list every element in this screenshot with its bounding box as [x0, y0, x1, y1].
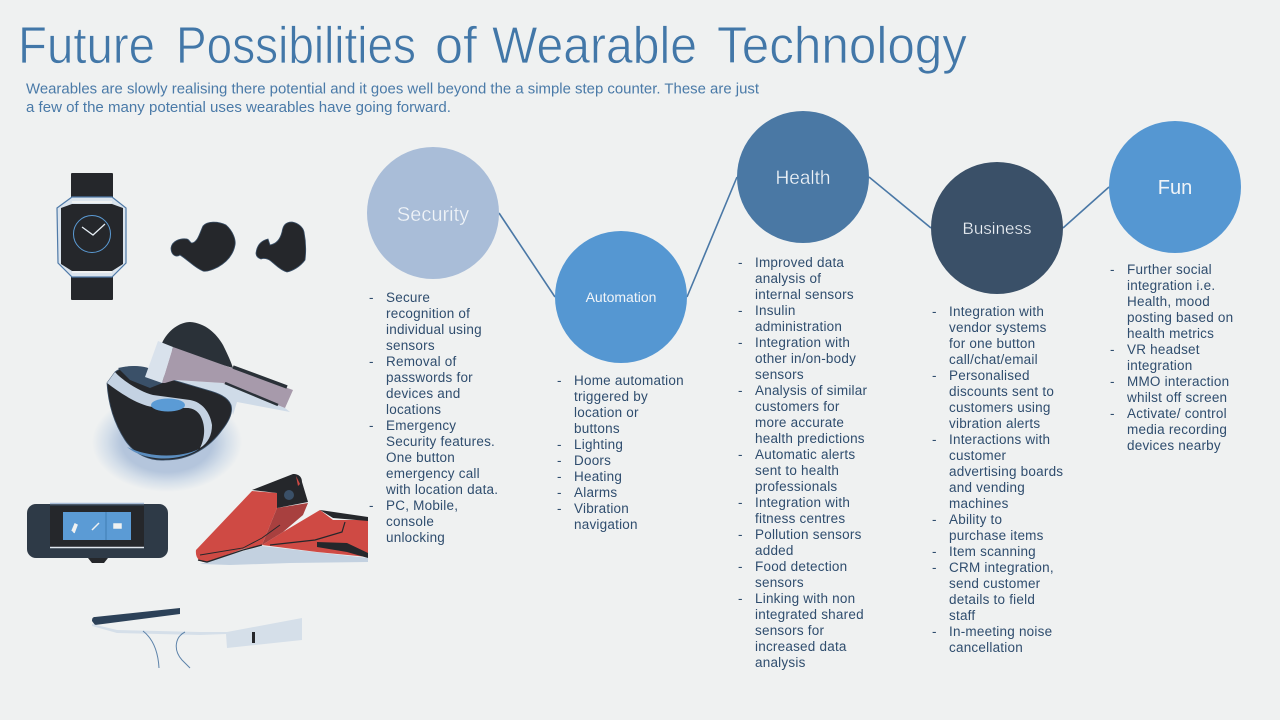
- text block: Automation: location or: [574, 405, 639, 420]
- text block: Health: -: [738, 255, 743, 270]
- title: Wearable: [492, 17, 697, 75]
- text block: Security: console: [386, 514, 434, 529]
- icon: right earbud: [256, 222, 306, 272]
- text block: Business: -: [932, 304, 937, 319]
- text block: Security: emergency call: [386, 466, 480, 481]
- text block: Business: Integration with: [949, 304, 1044, 319]
- text block: Automation: -: [557, 437, 562, 452]
- text block: Health: fitness centres: [755, 511, 845, 526]
- text block: Health: health predictions: [755, 431, 865, 446]
- text block: Security: Security features.: [386, 434, 495, 449]
- text block: Automation: Vibration: [574, 501, 629, 516]
- text block: Automation: -: [557, 373, 562, 388]
- text block: Business: -: [932, 560, 937, 575]
- text block: Business: Interactions with: [949, 432, 1050, 447]
- icon: fitness band: [27, 504, 168, 563]
- title: Possibilities: [176, 17, 416, 75]
- text block: Health: Analysis of similar: [755, 383, 867, 398]
- text block: Health: Integration with: [755, 335, 850, 350]
- text block: Health: sensors: [755, 367, 804, 382]
- circle: Security: [367, 147, 499, 279]
- text block: Health: customers for: [755, 399, 840, 414]
- text block: Automation: -: [557, 453, 562, 468]
- text block: Health: [738, 255, 867, 670]
- text block: Fun: health metrics: [1127, 326, 1214, 341]
- text block: Fun: -: [1110, 262, 1115, 277]
- text block: Health: Improved data: [755, 255, 844, 270]
- icon: smart glasses: [92, 608, 302, 668]
- icon: VR headset: [92, 322, 293, 492]
- circle: Security: Security: [397, 204, 469, 226]
- text block: Business: -: [932, 544, 937, 559]
- text block: Fun: -: [1110, 374, 1115, 389]
- text block: Health: -: [738, 495, 743, 510]
- text block: Fun: MMO interaction: [1127, 374, 1229, 389]
- text block: Business: -: [932, 432, 937, 447]
- circle: Health: [737, 111, 869, 243]
- text block: Business: vendor systems: [949, 320, 1047, 335]
- text block: Health: increased data: [755, 639, 847, 654]
- text block: Health: analysis of: [755, 271, 821, 286]
- text block: Automation: Home automation: [574, 373, 684, 388]
- text block: Automation: triggered by: [574, 389, 648, 404]
- text block: Business: send customer: [949, 576, 1041, 591]
- text block: Business: Ability to: [949, 512, 1002, 527]
- circle: Fun: Fun: [1158, 177, 1192, 199]
- text block: Security: individual using: [386, 322, 482, 337]
- text block: Fun: Health, mood: [1127, 294, 1210, 309]
- text block: Health: added: [755, 543, 794, 558]
- text block: Health: -: [738, 591, 743, 606]
- circle: Automation: Automation: [586, 289, 656, 305]
- text block: Security: Removal of: [386, 354, 457, 369]
- text block: Business: and vending: [949, 480, 1025, 495]
- text block: Security: -: [369, 498, 374, 513]
- text block: Business: details to field: [949, 592, 1035, 607]
- text block: Health: Integration with: [755, 495, 850, 510]
- text block: Health: Food detection: [755, 559, 847, 574]
- text block: Business: -: [932, 512, 937, 527]
- intro text: a few of the many potential uses wearables have going forward.: [26, 99, 451, 116]
- title: [18, 17, 967, 75]
- text block: Business: call/chat/email: [949, 352, 1038, 367]
- text block: Security: Emergency: [386, 418, 456, 433]
- text block: Security: recognition of: [386, 306, 470, 321]
- text block: Fun: media recording: [1127, 422, 1227, 437]
- connector lines: [499, 177, 1109, 297]
- text block: Business: vibration alerts: [949, 416, 1040, 431]
- text block: Business: staff: [949, 608, 975, 623]
- icon: left earbud: [171, 222, 235, 271]
- icon: red smart insoles: [196, 474, 368, 565]
- text block: Security: One button: [386, 450, 455, 465]
- text block: Health: Pollution sensors: [755, 527, 862, 542]
- text block: Business: purchase items: [949, 528, 1044, 543]
- title: of: [435, 17, 478, 75]
- text block: Fun: integration: [1127, 358, 1192, 373]
- text block: Health: more accurate: [755, 415, 844, 430]
- text block: Fun: posting based on: [1127, 310, 1233, 325]
- text block: Fun: -: [1110, 342, 1115, 357]
- title: Future: [18, 17, 155, 75]
- text block: Business: machines: [949, 496, 1009, 511]
- text block: Health: administration: [755, 319, 842, 334]
- text block: Business: customers using: [949, 400, 1051, 415]
- text block: Security: -: [369, 418, 374, 433]
- text block: Health: -: [738, 447, 743, 462]
- intro text: [26, 80, 760, 116]
- circle: Business: Business: [963, 219, 1031, 238]
- text block: Fun: VR headset: [1127, 342, 1200, 357]
- circle: Business: [931, 162, 1063, 294]
- text block: Security: locations: [386, 402, 441, 417]
- text block: Security: -: [369, 290, 374, 305]
- text block: Health: integrated shared: [755, 607, 864, 622]
- text block: Business: -: [932, 624, 937, 639]
- text block: Automation: Alarms: [574, 485, 617, 500]
- text block: Health: -: [738, 303, 743, 318]
- text block: Health: sensors for: [755, 623, 824, 638]
- text block: Business: advertising boards: [949, 464, 1063, 479]
- text block: Health: -: [738, 383, 743, 398]
- title: Technology: [717, 17, 967, 75]
- intro text: Wearables are slowly realising there potential and it goes well beyond the a simple step counter. These are just: [26, 80, 760, 98]
- text block: Automation: navigation: [574, 517, 638, 532]
- text block: Security: -: [369, 354, 374, 369]
- text block: Fun: integration i.e.: [1127, 278, 1215, 293]
- text block: Business: Item scanning: [949, 544, 1036, 559]
- text block: Security: passwords for: [386, 370, 473, 385]
- text block: Automation: buttons: [574, 421, 620, 436]
- text block: Health: -: [738, 335, 743, 350]
- text block: Fun: -: [1110, 406, 1115, 421]
- text block: Automation: Lighting: [574, 437, 623, 452]
- text block: Health: sent to health: [755, 463, 839, 478]
- text block: Fun: devices nearby: [1127, 438, 1221, 453]
- circle: Automation: [555, 231, 687, 363]
- text block: Security: sensors: [386, 338, 435, 353]
- text block: Security: [369, 290, 498, 545]
- text block: Automation: [557, 373, 684, 532]
- text block: Automation: -: [557, 485, 562, 500]
- text block: Business: discounts sent to: [949, 384, 1054, 399]
- text block: Fun: Further social: [1127, 262, 1212, 277]
- text block: Security: devices and: [386, 386, 460, 401]
- text block: Security: unlocking: [386, 530, 445, 545]
- circle: Health: Health: [776, 168, 830, 189]
- text block: Automation: -: [557, 469, 562, 484]
- text block: Health: internal sensors: [755, 287, 854, 302]
- text block: Business: for one button: [949, 336, 1035, 351]
- text block: Security: PC, Mobile,: [386, 498, 458, 513]
- text block: Health: analysis: [755, 655, 806, 670]
- text block: Business: cancellation: [949, 640, 1023, 655]
- text block: Business: customer: [949, 448, 1007, 463]
- text block: Fun: [1110, 262, 1233, 453]
- text block: Automation: -: [557, 501, 562, 516]
- text block: Health: -: [738, 527, 743, 542]
- text block: Automation: Heating: [574, 469, 622, 484]
- text block: Health: Insulin: [755, 303, 796, 318]
- circle: Fun: [1109, 121, 1241, 253]
- text block: Automation: Doors: [574, 453, 611, 468]
- text block: Health: professionals: [755, 479, 837, 494]
- text block: Business: [932, 304, 1063, 655]
- text block: Fun: Activate/ control: [1127, 406, 1227, 421]
- text block: Business: Personalised: [949, 368, 1030, 383]
- text block: Health: Automatic alerts: [755, 447, 855, 462]
- text block: Health: sensors: [755, 575, 804, 590]
- text block: Security: with location data.: [385, 482, 498, 497]
- text block: Health: other in/on-body: [755, 351, 856, 366]
- text block: Security: Secure: [386, 290, 430, 305]
- text block: Fun: whilst off screen: [1126, 390, 1227, 405]
- text block: Health: -: [738, 559, 743, 574]
- text block: Business: In-meeting noise: [949, 624, 1052, 639]
- text block: Health: Linking with non: [755, 591, 855, 606]
- icon: smartwatch: [57, 173, 126, 300]
- text block: Business: -: [932, 368, 937, 383]
- text block: Business: CRM integration,: [949, 560, 1054, 575]
